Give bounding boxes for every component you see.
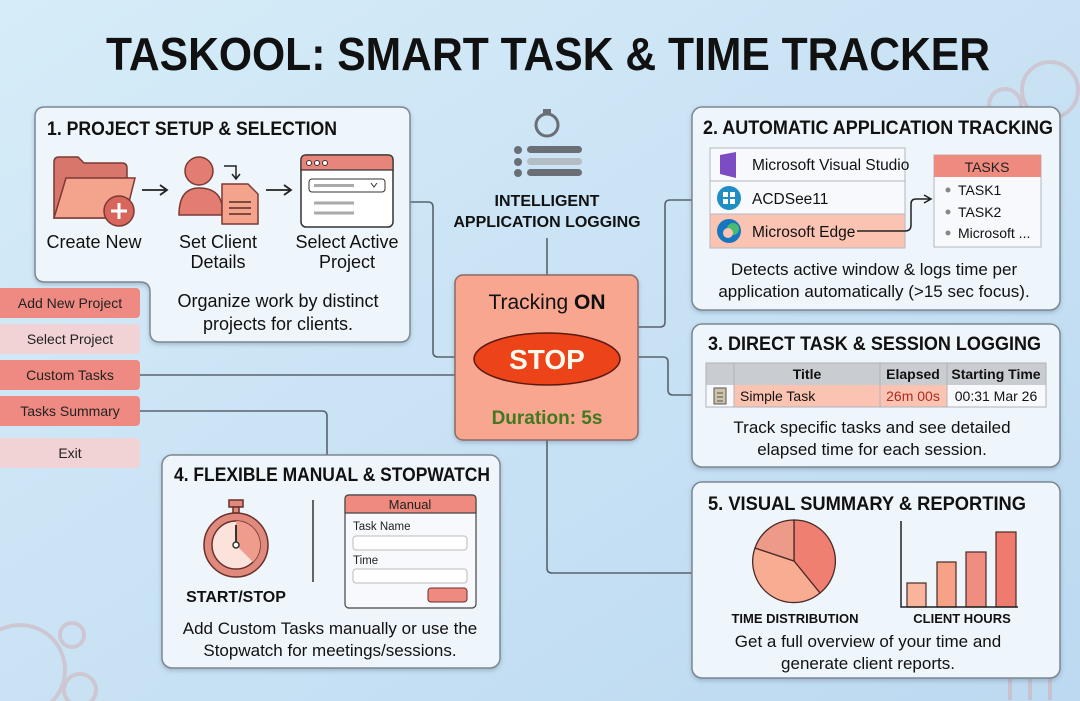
tasks box: TASK1 [958,182,1002,198]
tracking box [455,275,638,440]
menu buttons: Add New Project [18,295,122,311]
tracking box: Duration: 5s [492,408,602,429]
icon: window dropdown [301,155,393,227]
menu buttons: Select Project [27,331,113,347]
session table: Elapsed [886,366,940,382]
panel: visual summary: Get a full overview of your time and [735,632,1001,651]
manual form: Time [353,555,378,567]
pie chart [753,520,835,603]
panel: flexible manual & stopwatch [162,455,500,668]
arrow [266,185,291,195]
panel: direct task logging: elapsed time for each session. [757,440,987,459]
step labels: Select Active [295,232,399,252]
menu buttons: Exit [58,445,82,461]
panel: project setup [35,107,410,342]
tasks box: TASK2 [958,204,1002,220]
panel: flexible manual & stopwatch: Add Custom Tasks manually or use the [183,619,477,638]
tracking box: Tracking ON [488,291,606,314]
session table: 00:31 Mar 26 [955,388,1037,404]
panel: flexible manual & stopwatch: 4. FLEXIBLE MANUAL & STOPWATCH [174,465,490,486]
panel: automatic application tracking: application automatically (>15 sec focus). [718,282,1030,301]
app list: ACDSee11 [752,191,828,208]
bar chart [901,521,1018,607]
session table: Title [793,366,821,382]
icon: stopwatch [204,500,268,577]
connectors [140,200,692,573]
description: Organize work by distinct [177,291,379,311]
step labels: Details [190,252,246,272]
stop button: STOP [509,344,585,375]
label: intelligent logging: INTELLIGENT [495,193,600,210]
label: intelligent logging: APPLICATION LOGGING [453,214,641,231]
title: TASKOOL: SMART TASK & TIME TRACKER [106,28,990,80]
icon: intelligent logging [514,109,582,177]
arrow [142,185,167,195]
panel: direct task logging [692,324,1060,467]
panel: direct task logging: 3. DIRECT TASK & SESSION LOGGING [708,334,1041,355]
tasks box [934,155,1041,247]
app list [710,148,931,248]
app list: Microsoft Edge [752,224,855,241]
tasks box: TASKS [965,159,1009,175]
panel: flexible manual & stopwatch: Stopwatch for meetings/sessions. [203,641,457,660]
step labels [46,232,399,272]
step labels: Project [319,252,375,272]
menu buttons: Custom Tasks [26,367,114,383]
description [177,291,379,334]
session table: 26m 00s [886,388,940,404]
manual form: Task Name [353,521,411,533]
step labels: Set Client [179,232,257,252]
session table: Simple Task [740,388,816,404]
panel: automatic application tracking [692,107,1060,310]
panel: direct task logging: Track specific tasks and see detailed [733,418,1011,437]
panel: flexible manual & stopwatch: START/STOP [186,589,286,606]
manual form: Manual [389,497,431,512]
session table: Starting Time [951,366,1041,382]
panel: visual summary: generate client reports. [781,654,955,673]
menu buttons: Tasks Summary [20,403,120,419]
session table [706,363,1046,407]
panel: visual summary: 5. VISUAL SUMMARY & REPORTING [708,494,1026,515]
label: intelligent logging [453,193,641,231]
panel: visual summary: CLIENT HOURS [913,611,1011,626]
stop button [474,333,620,385]
app list: Microsoft Visual Studio [752,157,909,174]
heading 1: 1. PROJECT SETUP & SELECTION [47,119,337,140]
icon: folder [54,157,135,226]
manual form [345,495,476,608]
description: projects for clients. [203,314,353,334]
panel: visual summary: TIME DISTRIBUTION [731,611,859,626]
panel: visual summary [692,482,1060,678]
panel: automatic application tracking: Detects active window & logs time per [731,260,1017,279]
tasks box: Microsoft ... [958,225,1030,241]
icon: person with document [179,157,258,224]
panel: automatic application tracking: 2. AUTOMATIC APPLICATION TRACKING [703,118,1053,139]
menu buttons [0,288,140,468]
step labels: Create New [46,232,143,252]
